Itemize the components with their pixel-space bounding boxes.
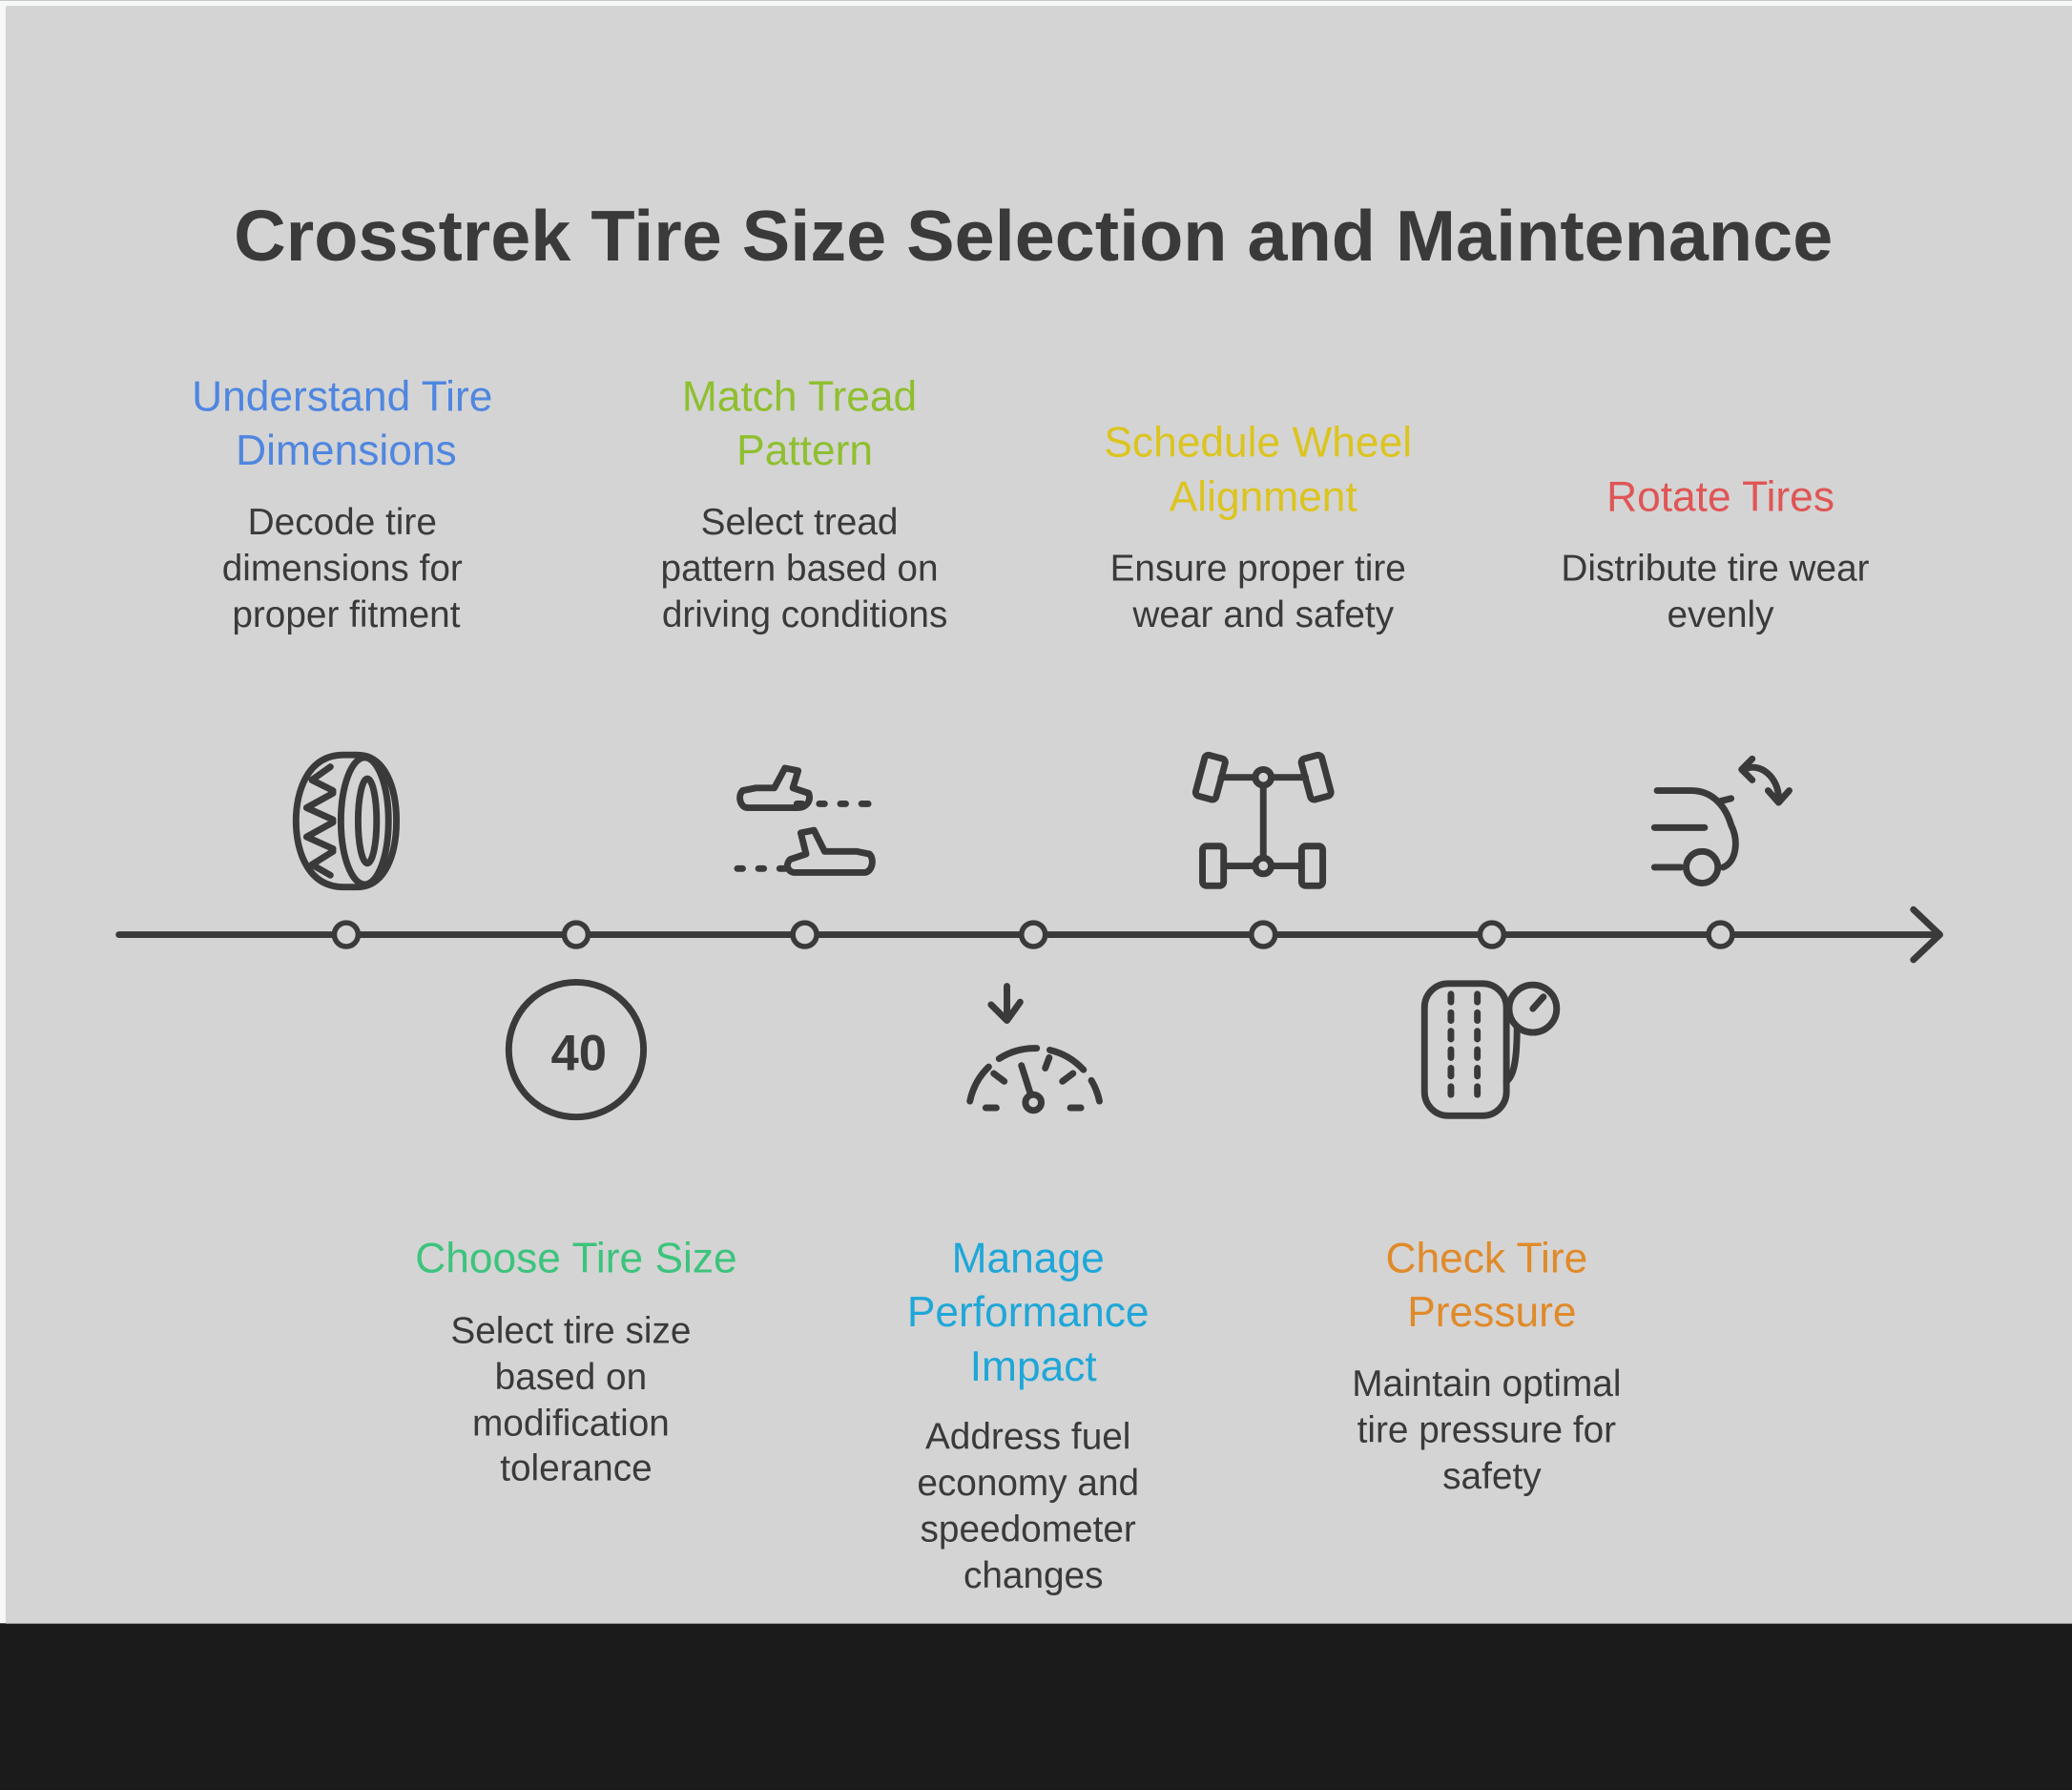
step: Schedule Wheel Alignment: Alignment [1170,474,1357,521]
step: Manage Performance Impact: economy and [917,1463,1139,1504]
step: Rotate Tires: evenly [1668,594,1774,635]
step: Choose Tire Size: based on [495,1357,647,1398]
step: Match Tread Pattern: Select tread [701,502,898,543]
step: Check Tire Pressure: Check Tire [1385,1235,1587,1281]
step: Understand Tire Dimensions [192,373,492,635]
step: Understand Tire Dimensions: Decode tire [248,502,437,543]
step: Schedule Wheel Alignment: Ensure proper tire [1110,548,1406,589]
icon: speed 40 [508,982,644,1117]
step: Match Tread Pattern: Pattern [736,427,873,474]
step: Check Tire Pressure: Maintain optimal [1352,1363,1621,1405]
step: Manage Performance Impact [907,1235,1150,1596]
step: Choose Tire Size: Choose Tire Size [415,1235,737,1281]
step: Schedule Wheel Alignment: Schedule Wheel [1104,420,1412,467]
icon: rotate tires [1654,759,1790,884]
step: Match Tread Pattern: driving conditions [662,594,947,635]
step: Choose Tire Size: Select tire size [450,1311,691,1352]
icon: tire pressure [1424,984,1557,1115]
step: Match Tread Pattern [661,373,947,635]
icon: tread pattern [737,768,872,872]
step: Understand Tire Dimensions: Understand Tire [192,373,492,420]
step: Match Tread Pattern: pattern based on [661,548,939,589]
step: Manage Performance Impact: Impact [970,1343,1097,1390]
icon: wheel alignment [1194,754,1332,885]
title: Crosstrek Tire Size Selection and Maintenance [234,196,1833,276]
step: Check Tire Pressure [1352,1235,1621,1497]
step: Understand Tire Dimensions: dimensions for [222,548,463,589]
step: Schedule Wheel Alignment: wear and safety [1131,594,1395,635]
step: Manage Performance Impact: Performance [907,1289,1150,1336]
step: Manage Performance Impact: changes [963,1555,1104,1596]
icon: speed 40: 40 [550,1026,607,1082]
step: Rotate Tires: Distribute tire wear [1561,548,1870,589]
step: Manage Performance Impact: Address fuel [925,1416,1130,1457]
step: Match Tread Pattern: Match Tread [682,373,917,420]
step: Understand Tire Dimensions: proper fitment [232,594,461,635]
step: Check Tire Pressure: tire pressure for [1357,1410,1616,1451]
icon: speedometer [970,987,1099,1111]
step: Check Tire Pressure: Pressure [1407,1289,1577,1336]
step: Choose Tire Size: modification [472,1404,670,1445]
step: Understand Tire Dimensions: Dimensions [236,427,457,474]
timeline arrow [119,909,1939,960]
step: Rotate Tires [1561,474,1870,635]
step: Manage Performance Impact: Manage [952,1235,1105,1281]
step: Choose Tire Size [415,1235,737,1489]
step: Choose Tire Size: tolerance [500,1448,653,1489]
step: Manage Performance Impact: speedometer [921,1509,1136,1550]
step: Rotate Tires: Rotate Tires [1606,474,1834,521]
step: Schedule Wheel Alignment [1104,420,1412,635]
step: Check Tire Pressure: safety [1442,1456,1542,1497]
icon: tire [296,755,397,887]
